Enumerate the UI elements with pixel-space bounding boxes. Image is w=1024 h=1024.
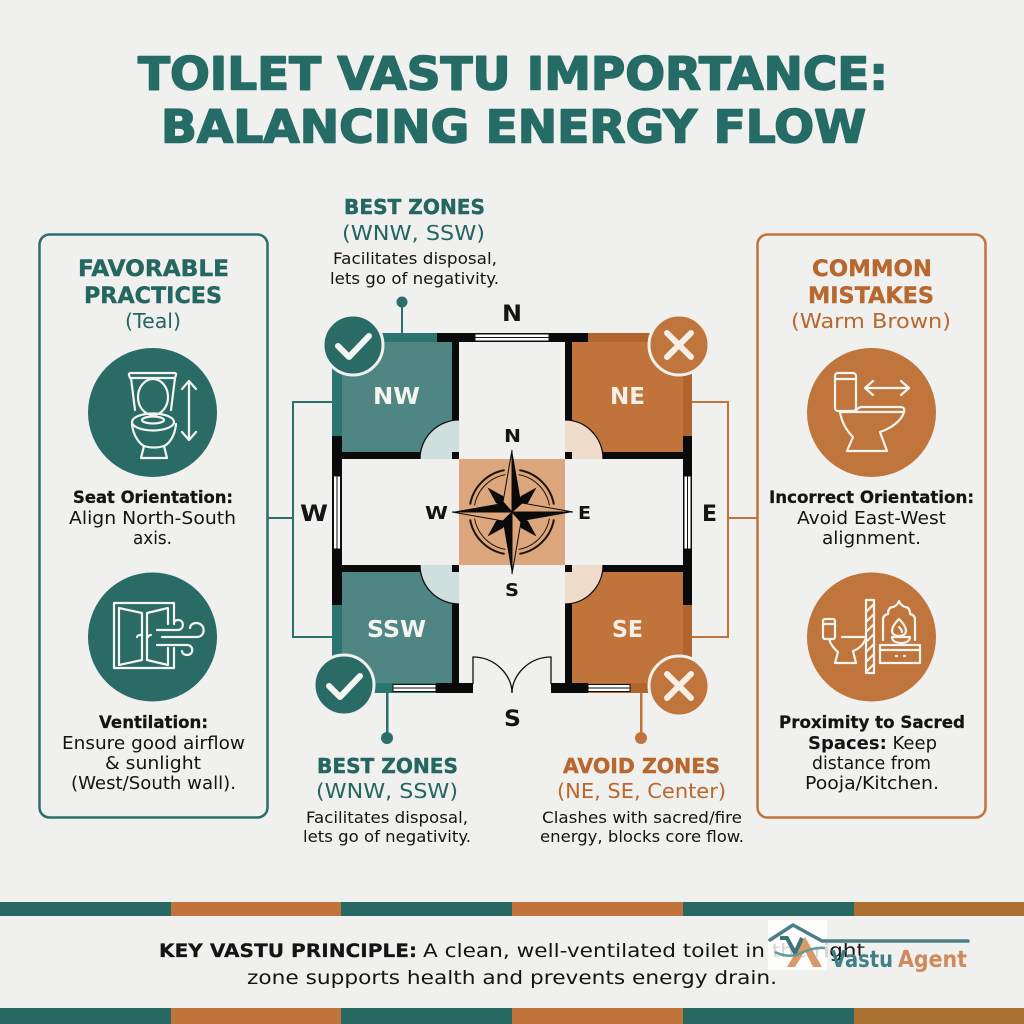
footer band: bottom [0, 1008, 1024, 1024]
panel heading: common mistakes: MISTAKES [808, 284, 934, 309]
key principle text: zone supports health and prevents energy drain. [247, 967, 777, 989]
text: incorrect orientation: Incorrect Orientation: [769, 488, 974, 508]
callout: best zones top: (WNW, SSW) [342, 221, 485, 245]
badge: SE cross [649, 656, 709, 716]
outer direction labels: S [504, 707, 521, 732]
connector: right bracket [692, 402, 757, 637]
callout: best zones top [330, 195, 499, 334]
logo: Vastu Agent: Agent [898, 947, 967, 973]
floor plan [300, 302, 717, 732]
panel heading: common mistakes: (Warm Brown) [791, 309, 951, 333]
panel heading: favorable practices: PRACTICES [84, 284, 222, 309]
room: NW: NW [373, 384, 420, 410]
panel heading: common mistakes: COMMON [812, 257, 932, 282]
text: ventilation [62, 713, 245, 794]
room: NW [332, 333, 456, 456]
text: proximity to sacred spaces [779, 713, 965, 794]
text: ventilation: (West/South wall). [71, 773, 236, 794]
callout: avoid zones: (NE, SE, Center) [557, 779, 726, 803]
panel heading: favorable practices: FAVORABLE [78, 257, 229, 282]
text: proximity to sacred spaces: Pooja/Kitchen. [805, 773, 939, 794]
door swings to corner rooms [420, 420, 603, 604]
windows [334, 334, 691, 692]
key principle text [159, 940, 865, 989]
compass rose [452, 450, 573, 574]
callout: best zones bottom: lets go of negativity. [303, 827, 471, 846]
key principle text: A clean, well-ventilated toilet in the right [423, 940, 865, 962]
text: proximity to sacred spaces: distance from [812, 753, 931, 774]
inner compass labels: W [425, 503, 448, 524]
text: seat orientation [69, 488, 236, 549]
outer direction labels [300, 302, 717, 732]
outer direction labels: W [300, 502, 328, 527]
callout: avoid zones [540, 693, 744, 846]
panel heading: favorable practices [78, 257, 229, 333]
text: seat orientation: axis. [133, 528, 172, 549]
inner compass labels: N [504, 426, 521, 447]
room: SE: SE [612, 617, 643, 643]
title [138, 48, 888, 154]
inner compass labels [425, 426, 591, 601]
room: SE [568, 569, 692, 693]
key principle text: KEY VASTU PRINCIPLE: [159, 940, 417, 962]
outer direction labels: N [502, 302, 522, 327]
title: TOILET VASTU IMPORTANCE: [138, 48, 888, 100]
outer direction labels: E [702, 502, 717, 527]
footer band: top [0, 902, 1024, 916]
badge: NE cross [649, 315, 709, 375]
callout: best zones top: lets go of negativity. [330, 269, 499, 288]
center square [459, 459, 565, 565]
text: incorrect orientation [769, 488, 974, 549]
inner compass labels: S [505, 580, 519, 601]
room: SSW [332, 569, 456, 693]
icon: toilet with north-south arrow [88, 348, 217, 477]
entrance door [473, 657, 551, 693]
panel heading: common mistakes [791, 257, 951, 333]
room: NE [568, 333, 692, 456]
room: SSW: SSW [367, 617, 426, 643]
panel heading: favorable practices: (Teal) [125, 309, 181, 333]
badge: SSW check [314, 655, 374, 715]
text: incorrect orientation: Avoid East-West [797, 508, 946, 529]
callout: best zones top: BEST ZONES [344, 195, 485, 219]
icon: open window with airflow [88, 572, 217, 702]
text: seat orientation: Seat Orientation: [73, 488, 233, 508]
text: proximity to sacred spaces: Spaces: Keep [808, 733, 937, 754]
icon: toilet with east-west arrow [807, 348, 936, 477]
callout: best zones bottom: BEST ZONES [317, 754, 458, 778]
room: NE: NE [610, 384, 645, 410]
panel: favorable practices [40, 234, 268, 818]
callout: best zones bottom: (WNW, SSW) [316, 779, 458, 803]
callout: avoid zones: Clashes with sacred/fire [542, 808, 742, 827]
text: proximity to sacred spaces: Proximity to Sacred [779, 713, 965, 733]
text: incorrect orientation: alignment. [822, 528, 921, 549]
icon: toilet near sacred space [807, 572, 936, 702]
panel: common mistakes [758, 234, 986, 818]
text: ventilation: Ventilation: [99, 713, 208, 733]
text: seat orientation: Align North-South [69, 508, 236, 529]
callout: best zones bottom: Facilitates disposal, [306, 808, 468, 827]
callout: avoid zones: AVOID ZONES [563, 754, 720, 778]
callout: best zones top: Facilitates disposal, [333, 249, 497, 268]
inner compass labels: E [578, 503, 591, 524]
logo: Vastu Agent: Vastu [831, 947, 893, 973]
callout: avoid zones: energy, blocks core flow. [540, 827, 744, 846]
badge: NW check [323, 315, 383, 375]
walls [332, 333, 692, 693]
connector: left bracket [267, 402, 332, 637]
callout: best zones bottom [303, 693, 471, 846]
text: ventilation: Ensure good airflow [62, 733, 245, 754]
title: BALANCING ENERGY FLOW [161, 100, 866, 154]
logo: Vastu Agent [768, 920, 968, 973]
text: ventilation: & sunlight [105, 753, 201, 774]
